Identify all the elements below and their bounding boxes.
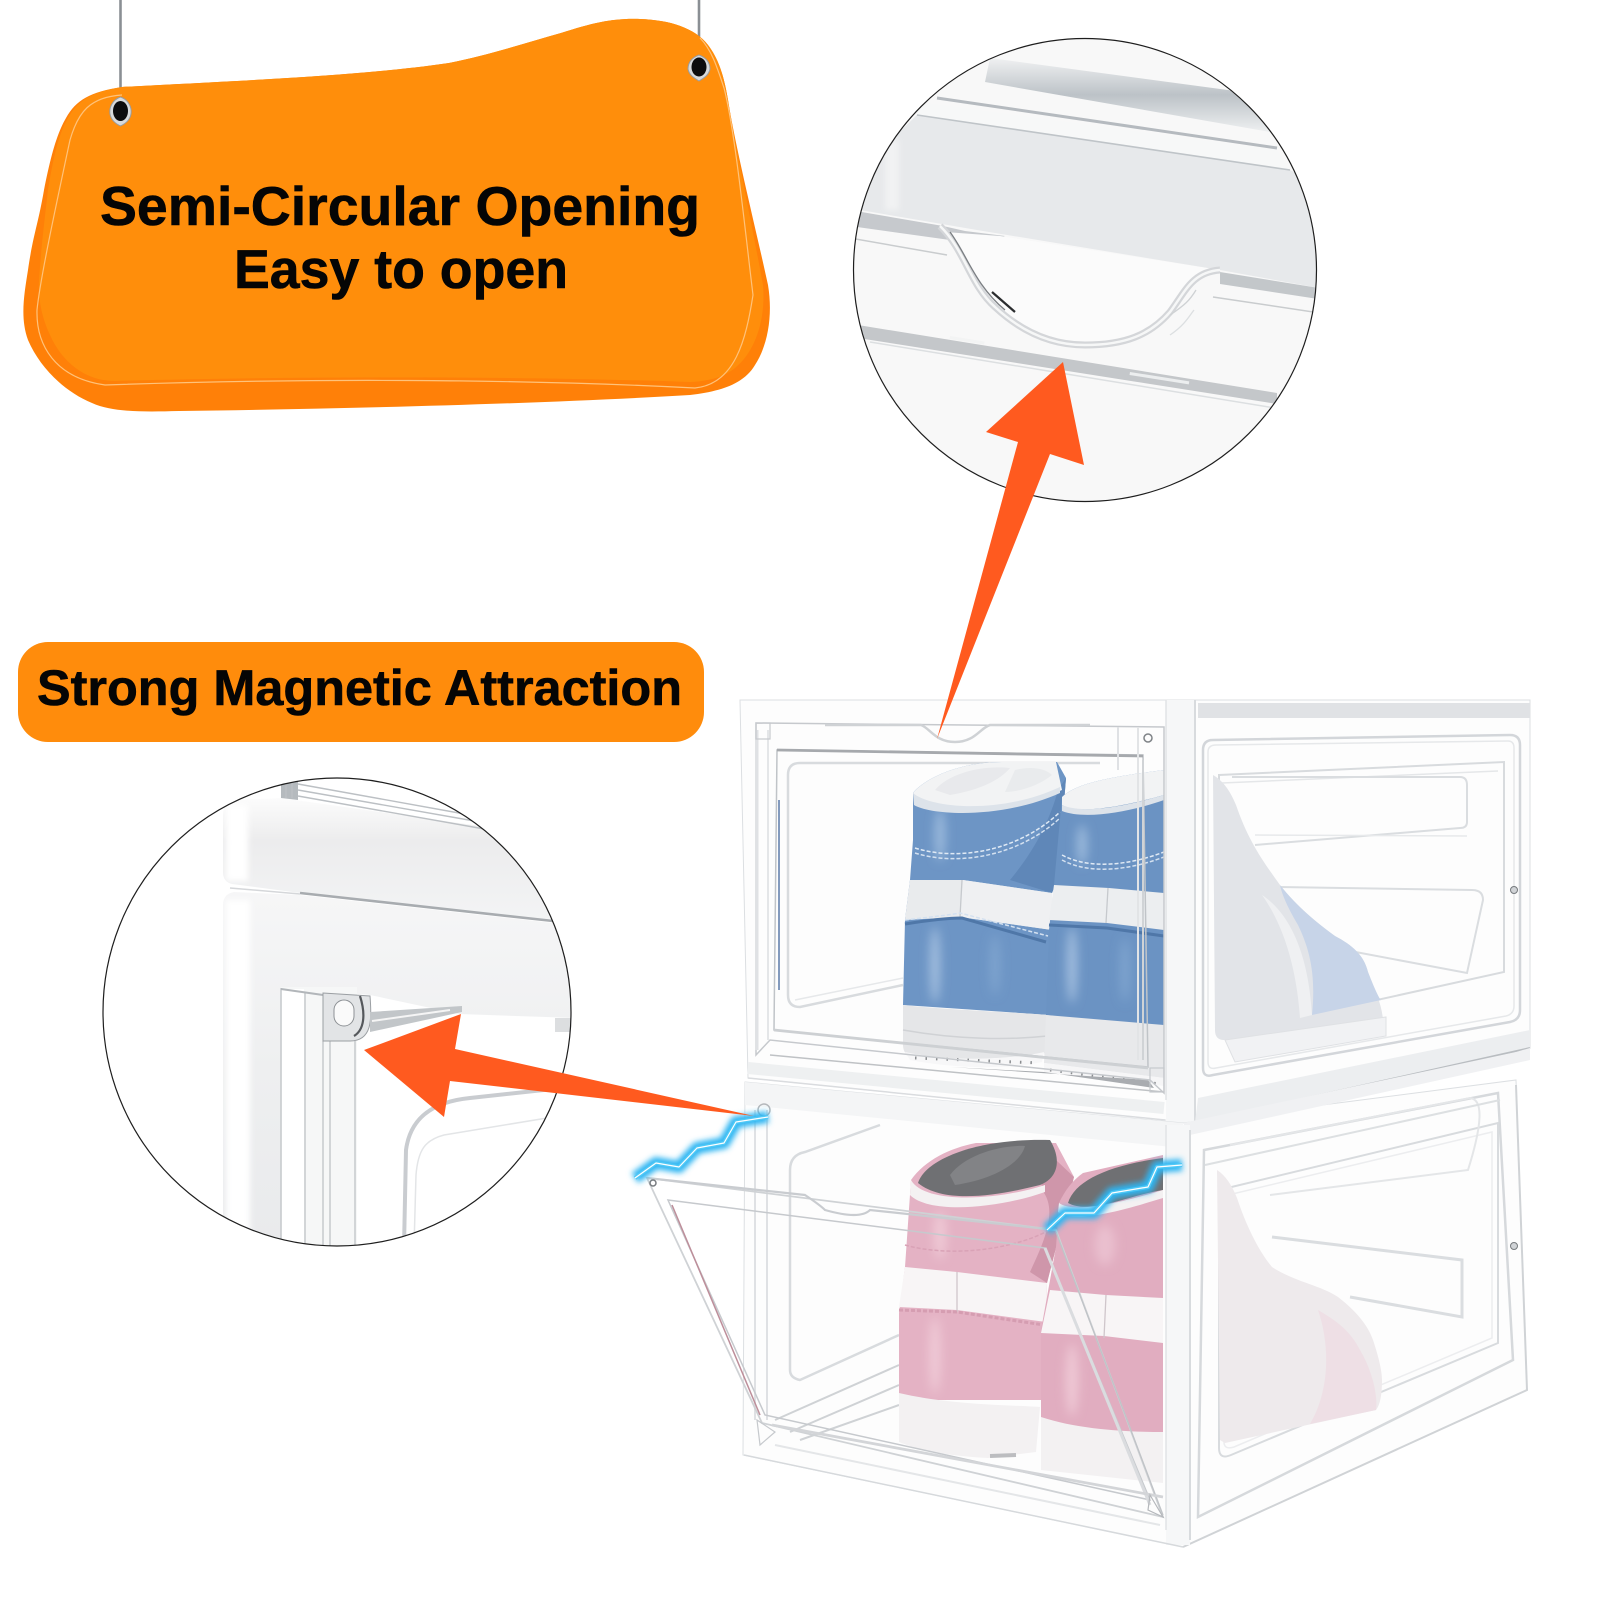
bottom left pillar	[755, 1110, 767, 1420]
magnetic spark left	[635, 1117, 768, 1178]
handle detail artwork	[850, 58, 1330, 408]
right blue shoe	[1044, 770, 1164, 1086]
left blue shoe	[903, 762, 1066, 1067]
circle callout: magnetic hinge detail	[103, 778, 575, 1247]
stacked shoe boxes	[635, 700, 1530, 1547]
pill text: Strong Magnetic Attraction	[37, 660, 682, 716]
open front door	[647, 1104, 1183, 1547]
sign heading line 2: Easy to open	[234, 238, 568, 300]
pill label	[18, 642, 704, 742]
top box side panel	[1166, 700, 1530, 1123]
ghost side view of pink shoe	[1217, 1170, 1382, 1443]
top box	[740, 700, 1530, 1123]
hanging sign	[23, 0, 770, 411]
blue shoes	[903, 762, 1164, 1088]
magnetic spark right	[1047, 1165, 1182, 1230]
arrow to hinge detail	[364, 1014, 754, 1117]
sign board	[23, 19, 770, 411]
sign face	[39, 19, 763, 382]
bottom back wall panel	[790, 1125, 899, 1380]
bottom floor rails	[775, 1365, 899, 1440]
pink shoes	[899, 1140, 1163, 1483]
sign inner highlight line	[37, 38, 753, 388]
sign hole left	[110, 97, 131, 126]
sign cords	[120, 0, 699, 104]
gray floor	[950, 1067, 1154, 1088]
hinge detail artwork	[223, 781, 575, 1247]
arrow up to handle detail	[937, 362, 1084, 739]
sign hole right	[688, 55, 710, 81]
circle callout: semi-circular handle detail	[850, 38, 1330, 502]
side screw top	[1510, 886, 1518, 894]
top box front door frame	[748, 723, 1165, 1120]
top box shell	[740, 700, 1530, 1123]
ghost side view of blue shoe	[1213, 775, 1386, 1062]
right pink shoe	[1041, 1155, 1163, 1483]
top box side edge	[1195, 1030, 1530, 1123]
bottom box	[635, 1048, 1530, 1547]
bottom box side panel	[1198, 1093, 1513, 1517]
bottom box shell	[743, 1080, 1527, 1547]
left pink shoe	[899, 1140, 1074, 1458]
side bottom edge	[1183, 1085, 1527, 1547]
sign heading line 1: Semi-Circular Opening	[100, 175, 700, 237]
back wall panel	[788, 763, 1100, 1007]
